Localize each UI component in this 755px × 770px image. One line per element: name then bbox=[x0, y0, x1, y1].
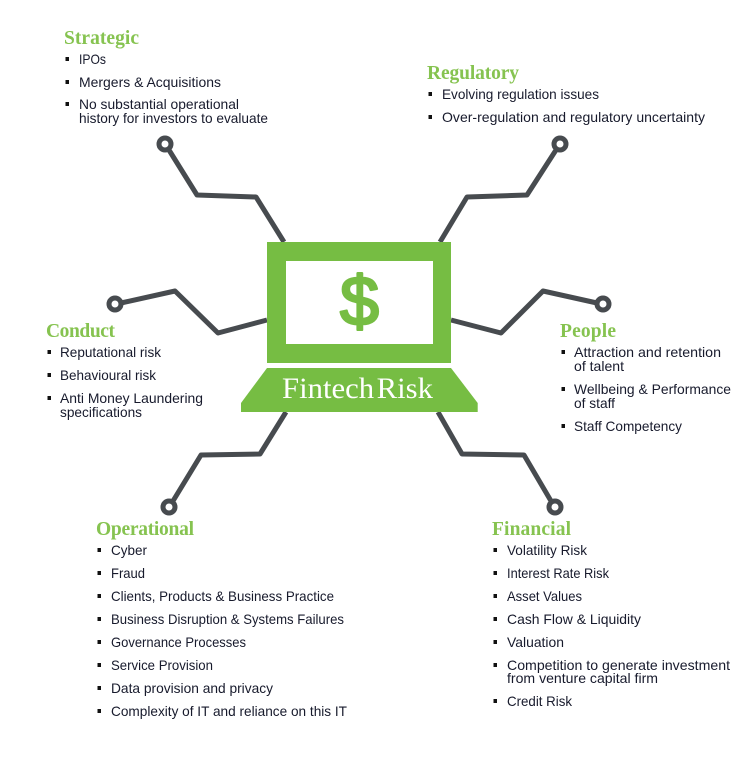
list: regulatory: Evolving regulation issues bbox=[442, 87, 599, 102]
panel: regulatory bbox=[427, 63, 705, 125]
panel: conduct bbox=[46, 321, 203, 420]
list: financial: Volatility Risk bbox=[507, 543, 587, 558]
list: strategic: Mergers & Acquisitions bbox=[79, 75, 221, 90]
list: conduct: Reputational risk bbox=[60, 345, 161, 360]
list: conduct: Anti Money Laundering bbox=[60, 391, 203, 406]
list: operational: Clients, Products & Business Practice bbox=[111, 589, 334, 604]
list: regulatory bbox=[428, 87, 705, 125]
laptop screen bbox=[267, 242, 451, 363]
list: operational: Service Provision bbox=[111, 658, 213, 673]
list: financial: Valuation bbox=[507, 635, 564, 650]
list: operational bbox=[98, 543, 347, 719]
list: operational: Data provision and privacy bbox=[111, 681, 273, 696]
connector: operational bbox=[163, 412, 286, 513]
connector: strategic bbox=[159, 138, 284, 242]
list: strategic: No substantial operational bbox=[79, 97, 239, 112]
panel: people bbox=[560, 321, 731, 434]
list: people bbox=[562, 345, 731, 434]
list: operational: Fraud bbox=[111, 566, 145, 581]
central laptop icon bbox=[241, 242, 478, 412]
heading: operational: Operational bbox=[96, 519, 195, 540]
list: financial: Asset Values bbox=[507, 589, 582, 604]
laptop label: Fintech Risk bbox=[282, 372, 433, 405]
list: conduct: Behavioural risk bbox=[60, 368, 156, 383]
heading: strategic: Strategic bbox=[64, 28, 139, 49]
list: conduct: specifications bbox=[60, 405, 142, 420]
list: strategic: IPOs bbox=[79, 52, 106, 67]
connector: people bbox=[451, 291, 609, 333]
panel: financial bbox=[492, 519, 730, 709]
connector: conduct bbox=[109, 291, 267, 333]
list: people: Wellbeing & Performance bbox=[574, 382, 731, 397]
heading: regulatory: Regulatory bbox=[427, 63, 519, 84]
list: operational: Governance Processes bbox=[111, 635, 246, 650]
list: regulatory: Over-regulation and regulatory uncertainty bbox=[442, 110, 705, 125]
list: people: Staff Competency bbox=[574, 419, 682, 434]
list: financial: Cash Flow & Liquidity bbox=[507, 612, 641, 627]
heading: financial: Financial bbox=[492, 519, 572, 540]
list: strategic: history for investors to evaluate bbox=[79, 111, 268, 126]
heading: conduct: Conduct bbox=[46, 321, 116, 342]
heading: people: People bbox=[560, 321, 616, 342]
list: people: Attraction and retention bbox=[574, 345, 721, 360]
list: financial: from venture capital firm bbox=[507, 671, 658, 686]
list: people: of staff bbox=[574, 396, 615, 411]
list: people: of talent bbox=[574, 359, 624, 374]
dollar sign: $ bbox=[340, 262, 379, 340]
list: financial bbox=[494, 543, 730, 709]
list: operational: Complexity of IT and reliance on this IT bbox=[111, 704, 347, 719]
panel: operational bbox=[96, 519, 347, 719]
list: financial: Interest Rate Risk bbox=[507, 566, 609, 581]
list: strategic bbox=[66, 52, 268, 126]
list: conduct bbox=[48, 345, 203, 420]
panel: strategic bbox=[64, 28, 268, 126]
list: financial: Credit Risk bbox=[507, 694, 572, 709]
list: operational: Business Disruption & Systems Failures bbox=[111, 612, 344, 627]
laptop base bbox=[241, 368, 478, 412]
list: financial: Competition to generate investment bbox=[507, 658, 730, 673]
connector: regulatory bbox=[440, 138, 566, 242]
list: operational: Cyber bbox=[111, 543, 147, 558]
connector: financial bbox=[438, 412, 561, 513]
